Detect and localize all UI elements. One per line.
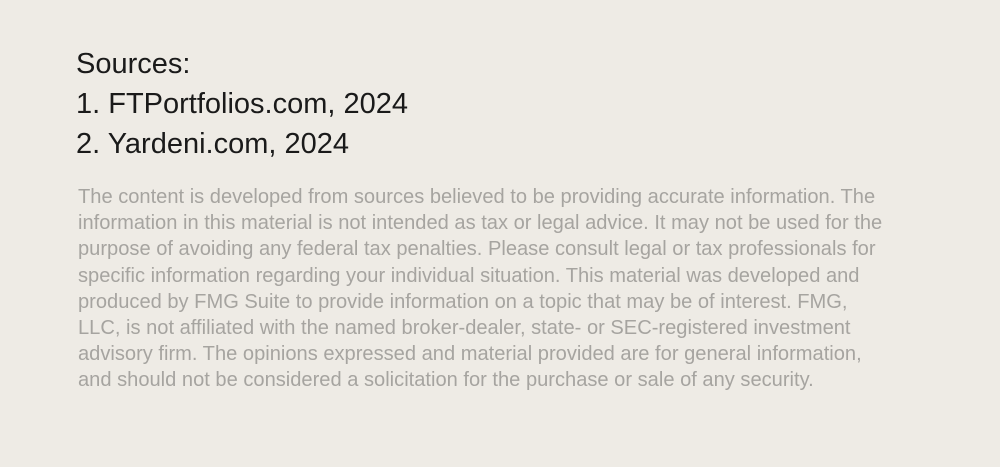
disclaimer text: specific information regarding your individual situation. This material was developed and: [78, 265, 859, 287]
disclaimer text: and should not be considered a solicitation for the purchase or sale of any security.: [78, 369, 814, 391]
disclaimer text: The content is developed from sources believed to be providing accurate information. The: [78, 186, 875, 208]
sources list: 2. Yardeni.com, 2024: [76, 128, 349, 160]
disclaimer text: information in this material is not intended as tax or legal advice. It may not be used for the: [78, 212, 882, 234]
disclaimer text: LLC, is not affiliated with the named broker-dealer, state- or SEC-registered investment: [78, 317, 851, 339]
disclaimer text: [78, 186, 882, 391]
disclaimer text: advisory firm. The opinions expressed and material provided are for general information,: [78, 343, 862, 365]
disclaimer text: purpose of avoiding any federal tax penalties. Please consult legal or tax professionals for: [78, 238, 876, 260]
disclaimer text: produced by FMG Suite to provide information on a topic that may be of interest. FMG,: [78, 291, 848, 313]
sources list: 1. FTPortfolios.com, 2024: [76, 88, 408, 120]
sources list: Sources:: [76, 48, 190, 80]
sources list: [76, 48, 408, 160]
